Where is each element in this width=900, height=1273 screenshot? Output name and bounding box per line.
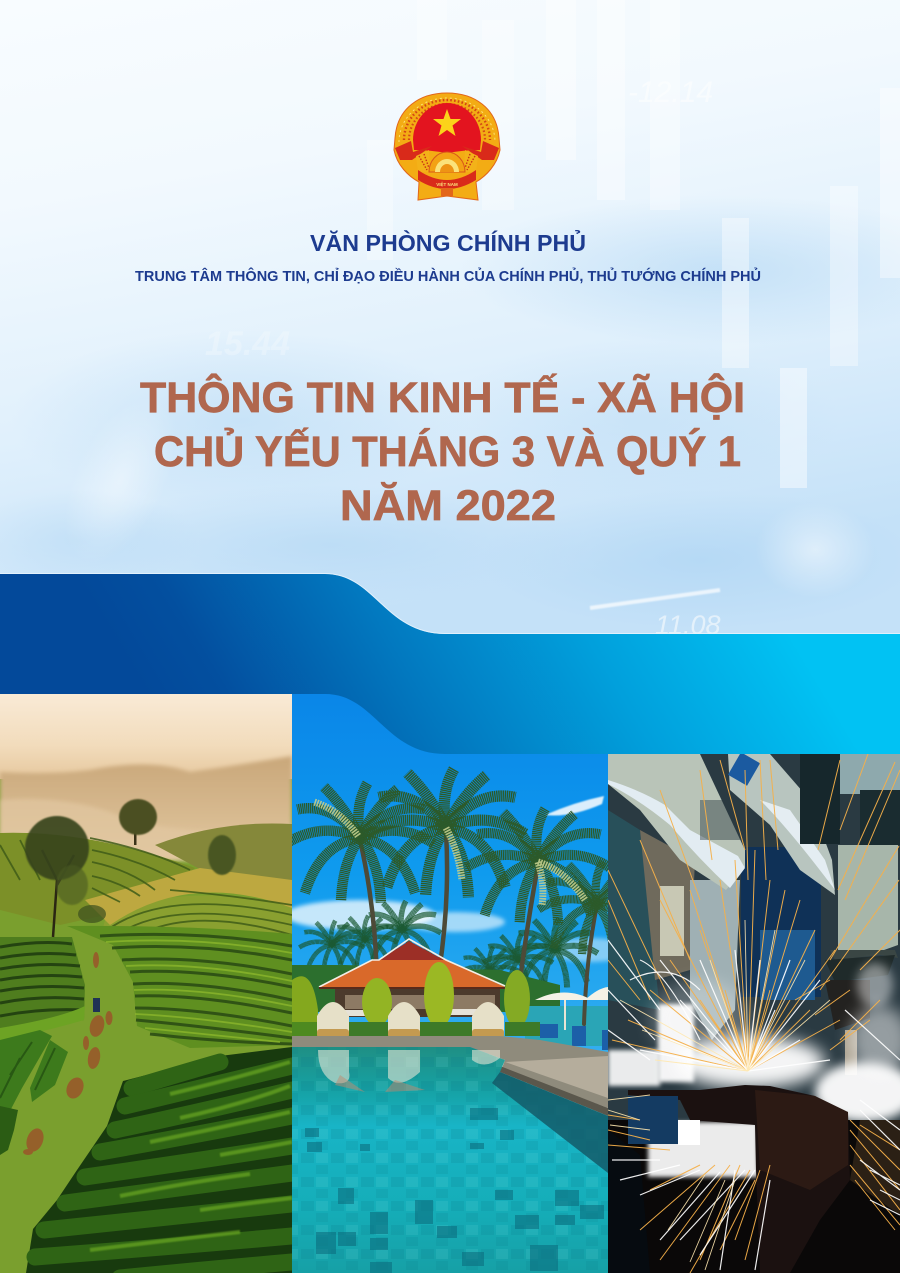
bungalow: [319, 939, 505, 1017]
curved blue ribbon band: [0, 574, 900, 754]
machinery backdrop: [741, 847, 821, 997]
left tea field: [0, 937, 85, 1035]
umbrellas: [535, 987, 608, 1030]
right column: [800, 754, 840, 844]
cattle and herder: [23, 952, 112, 1155]
bottom right tea field: [26, 1047, 292, 1273]
background: financial chart sky: [0, 0, 900, 640]
bed reflections: [318, 1050, 500, 1083]
main title: NĂM 2022: [340, 482, 556, 530]
white glare: [608, 963, 900, 1122]
ribbons and sheaves: [395, 141, 432, 160]
pool deck: [292, 1036, 608, 1108]
dark tiles: [305, 1108, 604, 1273]
cogwheel: [429, 152, 465, 172]
main title: [140, 373, 745, 530]
right tea field: [67, 926, 292, 1048]
clouds: [285, 796, 630, 962]
hedges: [292, 962, 540, 1036]
photo: welding robots with sparks: [608, 752, 900, 1273]
palm frond highlights: [314, 802, 585, 905]
lower machine silhouette: [608, 1085, 900, 1273]
chart label: -12.14: -12.14: [628, 76, 713, 109]
sparks: pale yellow: [608, 920, 830, 1270]
palm crowns: [292, 766, 608, 954]
tree: large: [25, 816, 106, 937]
header: sub organisation: TRUNG TÂM THÔNG TIN, CHỈ ĐẠO ĐIỀU HÀNH CỦA CHÍNH PHỦ, THỦ TƯỚNG CHÍNH PHỦ: [135, 267, 761, 285]
emblem of Vietnam: [394, 93, 500, 200]
chart label: 11.08: 11.08: [655, 610, 721, 640]
blue chairs: [540, 1024, 608, 1050]
upper middle arm: [728, 754, 835, 895]
tree: mid: [208, 835, 236, 875]
main title: THÔNG TIN KINH TẾ - XÃ HỘI: [140, 373, 745, 422]
palm trunks: [360, 832, 597, 1024]
sparks: orange: [608, 754, 900, 1273]
lounge beds: [317, 1002, 504, 1038]
swimming pool: [292, 1047, 608, 1273]
upper left arm: [608, 754, 745, 890]
photo: resort with palms and pool: [292, 694, 608, 1273]
chart label: 15.44: 15.44: [205, 325, 290, 363]
emblem caption: VIỆT NAM: [436, 180, 458, 187]
main title: CHỦ YẾU THÁNG 3 VÀ QUÝ 1: [154, 427, 741, 476]
header: organisation name: VĂN PHÒNG CHÍNH PHỦ: [310, 228, 586, 256]
ribbon: [418, 170, 476, 189]
background palms: [299, 901, 598, 997]
photo: tea hills with cattle: [0, 694, 292, 1273]
back hills: [0, 833, 195, 925]
tree: small: [119, 799, 157, 845]
star: [433, 109, 461, 136]
sparks: white hot: [608, 940, 900, 1270]
